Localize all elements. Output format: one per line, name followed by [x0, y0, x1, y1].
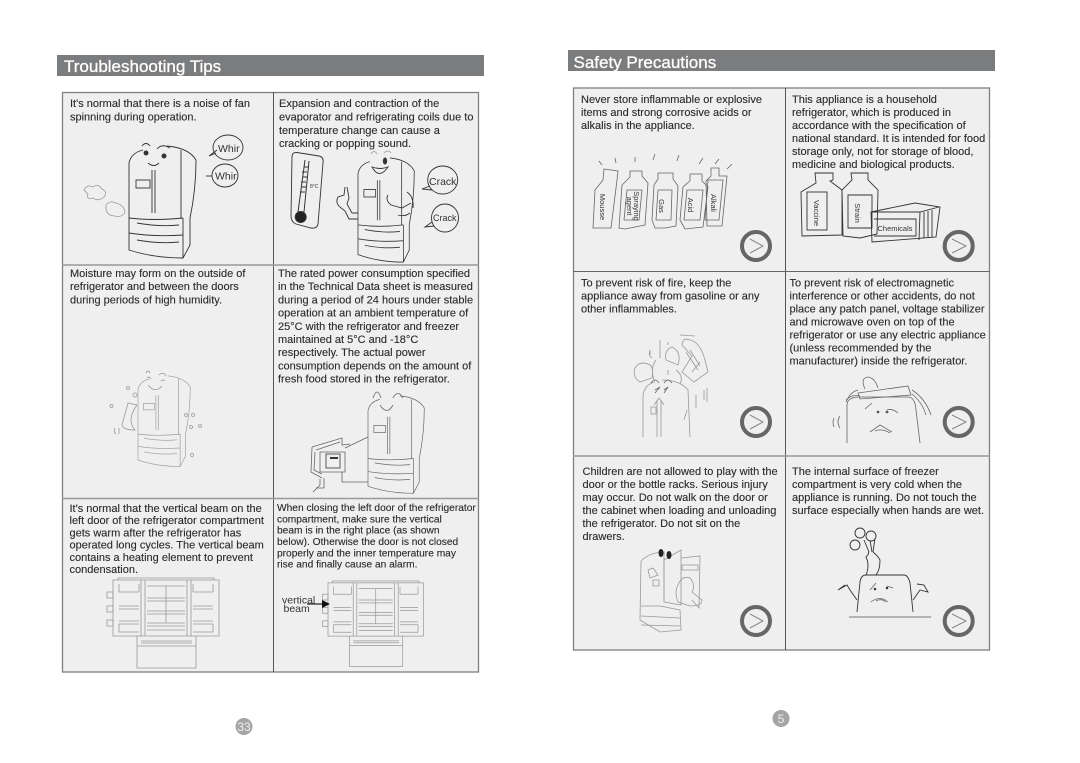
illustration: five bottles: Spraying	[632, 191, 641, 221]
illustration: five bottles: Acid	[686, 198, 695, 212]
text: rated power: during a period of 24 hours under stable	[278, 294, 473, 306]
callout: Whir	[209, 135, 243, 160]
illustration: fridge with moisture	[110, 371, 202, 467]
text: rated power: operation at an ambient temperature of	[278, 308, 469, 320]
text: vertical beam warm: condensation.	[70, 564, 138, 576]
text: children warning: the refrigerator. Do not sit on the	[582, 518, 740, 530]
callout: Whir: Whir	[215, 170, 237, 182]
text: freezer surface: appliance is running. Do not touch the	[792, 492, 977, 504]
text: electromagnetic interference: interference or other accidents, do not	[790, 290, 975, 302]
illustration: thermometer: 8°C	[310, 184, 319, 190]
text: rated power: fresh food stored in the refrigerator.	[278, 374, 450, 386]
text: expansion and contraction: evaporator and refrigerating coils due to	[279, 112, 473, 124]
right page header	[568, 50, 995, 72]
text: fire risk: other inflammables.	[581, 304, 677, 316]
icon: warning circle	[945, 408, 973, 436]
text: household appliance: accordance with the specification of	[792, 120, 967, 132]
illustration: five bottles: Gas	[657, 199, 666, 213]
illustration: thermometer	[291, 152, 323, 228]
text: electromagnetic interference: and microwave oven on top of the	[790, 316, 955, 328]
text: children warning: may occur. Do not walk on the door or	[582, 492, 768, 504]
text: closing the left door: rise and finally cause an alarm.	[277, 560, 417, 571]
text: children warning: door or the bottle racks. Serious injury	[582, 479, 768, 491]
text: electromagnetic interference: manufacturer) inside the refrigerator.	[790, 356, 967, 368]
text: inflammable storage: alkalis in the appliance.	[581, 120, 695, 132]
text: vertical beam warm: gets warm after the refrigerator has	[70, 527, 242, 539]
text: moisture: during periods of high humidity.	[70, 294, 222, 306]
illustration: vaccine, strain, chemicals: Strain	[853, 203, 862, 223]
icon: warning circle	[945, 607, 973, 635]
illustration: child on fridge door	[640, 549, 702, 632]
text: moisture: Moisture may form on the outside of	[70, 268, 246, 280]
label with arrow: vertical beam: vertical	[282, 594, 315, 606]
text: household appliance: national standard. It is intended for food	[792, 133, 985, 145]
text: closing the left door: below). Otherwise the door is not closed	[277, 537, 459, 548]
callout: Whir: Whir	[218, 143, 240, 155]
text: expansion and contraction: Expansion and contraction of the	[279, 98, 439, 110]
text: children warning: the cabinet when loading and unloading	[582, 505, 776, 517]
text: children warning: drawers.	[582, 531, 625, 543]
callout: Crack	[425, 204, 458, 232]
text: closing the left door: compartment, make sure the vertical	[277, 514, 442, 525]
callout: Crack: Crack	[433, 213, 457, 223]
text: fire risk: appliance away from gasoline or any	[581, 290, 760, 302]
illustration: five bottles: Alkali	[709, 194, 718, 212]
text: freezer surface: compartment is very cold when the	[792, 479, 962, 491]
text: household appliance: This appliance is a household	[792, 94, 937, 106]
illustration: vaccine, strain, chemicals: Chemicals	[877, 224, 913, 233]
left page header: Troubleshooting Tips	[64, 57, 221, 76]
page number 5	[772, 710, 790, 727]
text: electromagnetic interference: refrigerator or use any electric appliance	[790, 330, 986, 342]
text: vertical beam warm: contains a heating element to prevent	[70, 552, 253, 564]
label with arrow: vertical beam	[282, 594, 330, 615]
label with arrow: vertical beam: beam	[284, 603, 310, 615]
illustration: fridge with fan noise	[84, 144, 196, 258]
text: household appliance: medicine and biological products.	[792, 159, 955, 171]
illustration: five bottles: Mousse	[598, 194, 607, 220]
text: fire risk: To prevent risk of fire, keep the	[581, 278, 731, 290]
text: freezer surface: The internal surface of freezer	[792, 466, 939, 478]
left page header	[57, 55, 484, 76]
text: rated power: 25°C with the refrigerator and freezer	[278, 321, 459, 333]
text: household appliance: refrigerator, which is produced in	[792, 107, 951, 119]
illustration: fridge with power meter	[311, 392, 424, 493]
text: moisture: refrigerator and between the doors	[70, 281, 239, 293]
illustration: fridge and fire	[634, 335, 708, 437]
right page header: Safety Precautions	[574, 53, 716, 72]
page number 5: 5	[778, 712, 785, 726]
text: rated power: respectively. The actual power	[278, 347, 426, 359]
text: rated power: in the Technical Data sheet is measured	[278, 281, 473, 293]
text: closing the left door: properly and the inner temperature may	[277, 548, 457, 559]
text: freezer surface: surface especially when hands are wet.	[792, 505, 984, 517]
illustration: vaccine, strain, chemicals: Vaccine	[812, 200, 821, 226]
page number 33	[236, 718, 252, 735]
text: fan noise: It's normal that there is a noise of fan	[70, 98, 250, 110]
panel: troubleshooting table	[62, 92, 479, 672]
text: expansion and contraction: cracking or popping sound.	[279, 138, 411, 150]
text: children warning: Children are not allowed to play with the	[582, 466, 778, 478]
illustration: five bottles	[593, 154, 732, 229]
callout: Crack	[422, 166, 458, 194]
text: expansion and contraction: temperature change can cause a	[279, 125, 441, 137]
illustration: cold fridge with vase	[838, 528, 931, 617]
icon: warning circle	[742, 232, 770, 260]
text: electromagnetic interference: (unless recommended by the	[790, 342, 931, 354]
text: inflammable storage: Never store inflammable or explosive	[581, 94, 762, 106]
icon: warning circle	[945, 232, 973, 260]
page number 33: 33	[237, 720, 251, 734]
text: rated power: The rated power consumption specified	[278, 268, 470, 280]
text: electromagnetic interference: To prevent risk of electromagnetic	[790, 278, 954, 290]
text: rated power: maintained at 5°C and -18°C	[278, 334, 418, 346]
text: rated power: consumption depends on the amount of	[278, 360, 472, 372]
panel: safety table	[573, 88, 990, 650]
callout: Crack: Crack	[429, 176, 457, 188]
text: fan noise: spinning during operation.	[70, 111, 197, 123]
illustration: open refrigerator right	[323, 581, 423, 666]
text: vertical beam warm: It's normal that the vertical beam on the	[70, 503, 262, 515]
text: vertical beam warm: left door of the refrigerator compartment	[70, 515, 264, 527]
text: closing the left door: beam is in the right place (as shown	[277, 526, 440, 537]
icon: warning circle	[742, 408, 770, 436]
illustration: open refrigerator left	[107, 578, 219, 668]
callout: Whir	[206, 164, 238, 187]
illustration: vaccine, strain, chemicals	[801, 173, 940, 242]
illustration: fridge with power strip	[833, 377, 931, 443]
text: electromagnetic interference: place any patch panel, voltage stabilizer	[790, 304, 985, 316]
text: vertical beam warm: operated long cycles. The vertical beam	[70, 540, 264, 552]
illustration: fridge with crack noise	[337, 151, 414, 262]
text: household appliance: storage only, not for storage of blood,	[792, 146, 973, 158]
text: inflammable storage: items and strong corrosive acids or	[581, 107, 752, 119]
illustration: five bottles: agent	[625, 197, 634, 216]
icon: warning circle	[742, 607, 770, 635]
text: closing the left door: When closing the left door of the refrigerator	[277, 503, 476, 514]
